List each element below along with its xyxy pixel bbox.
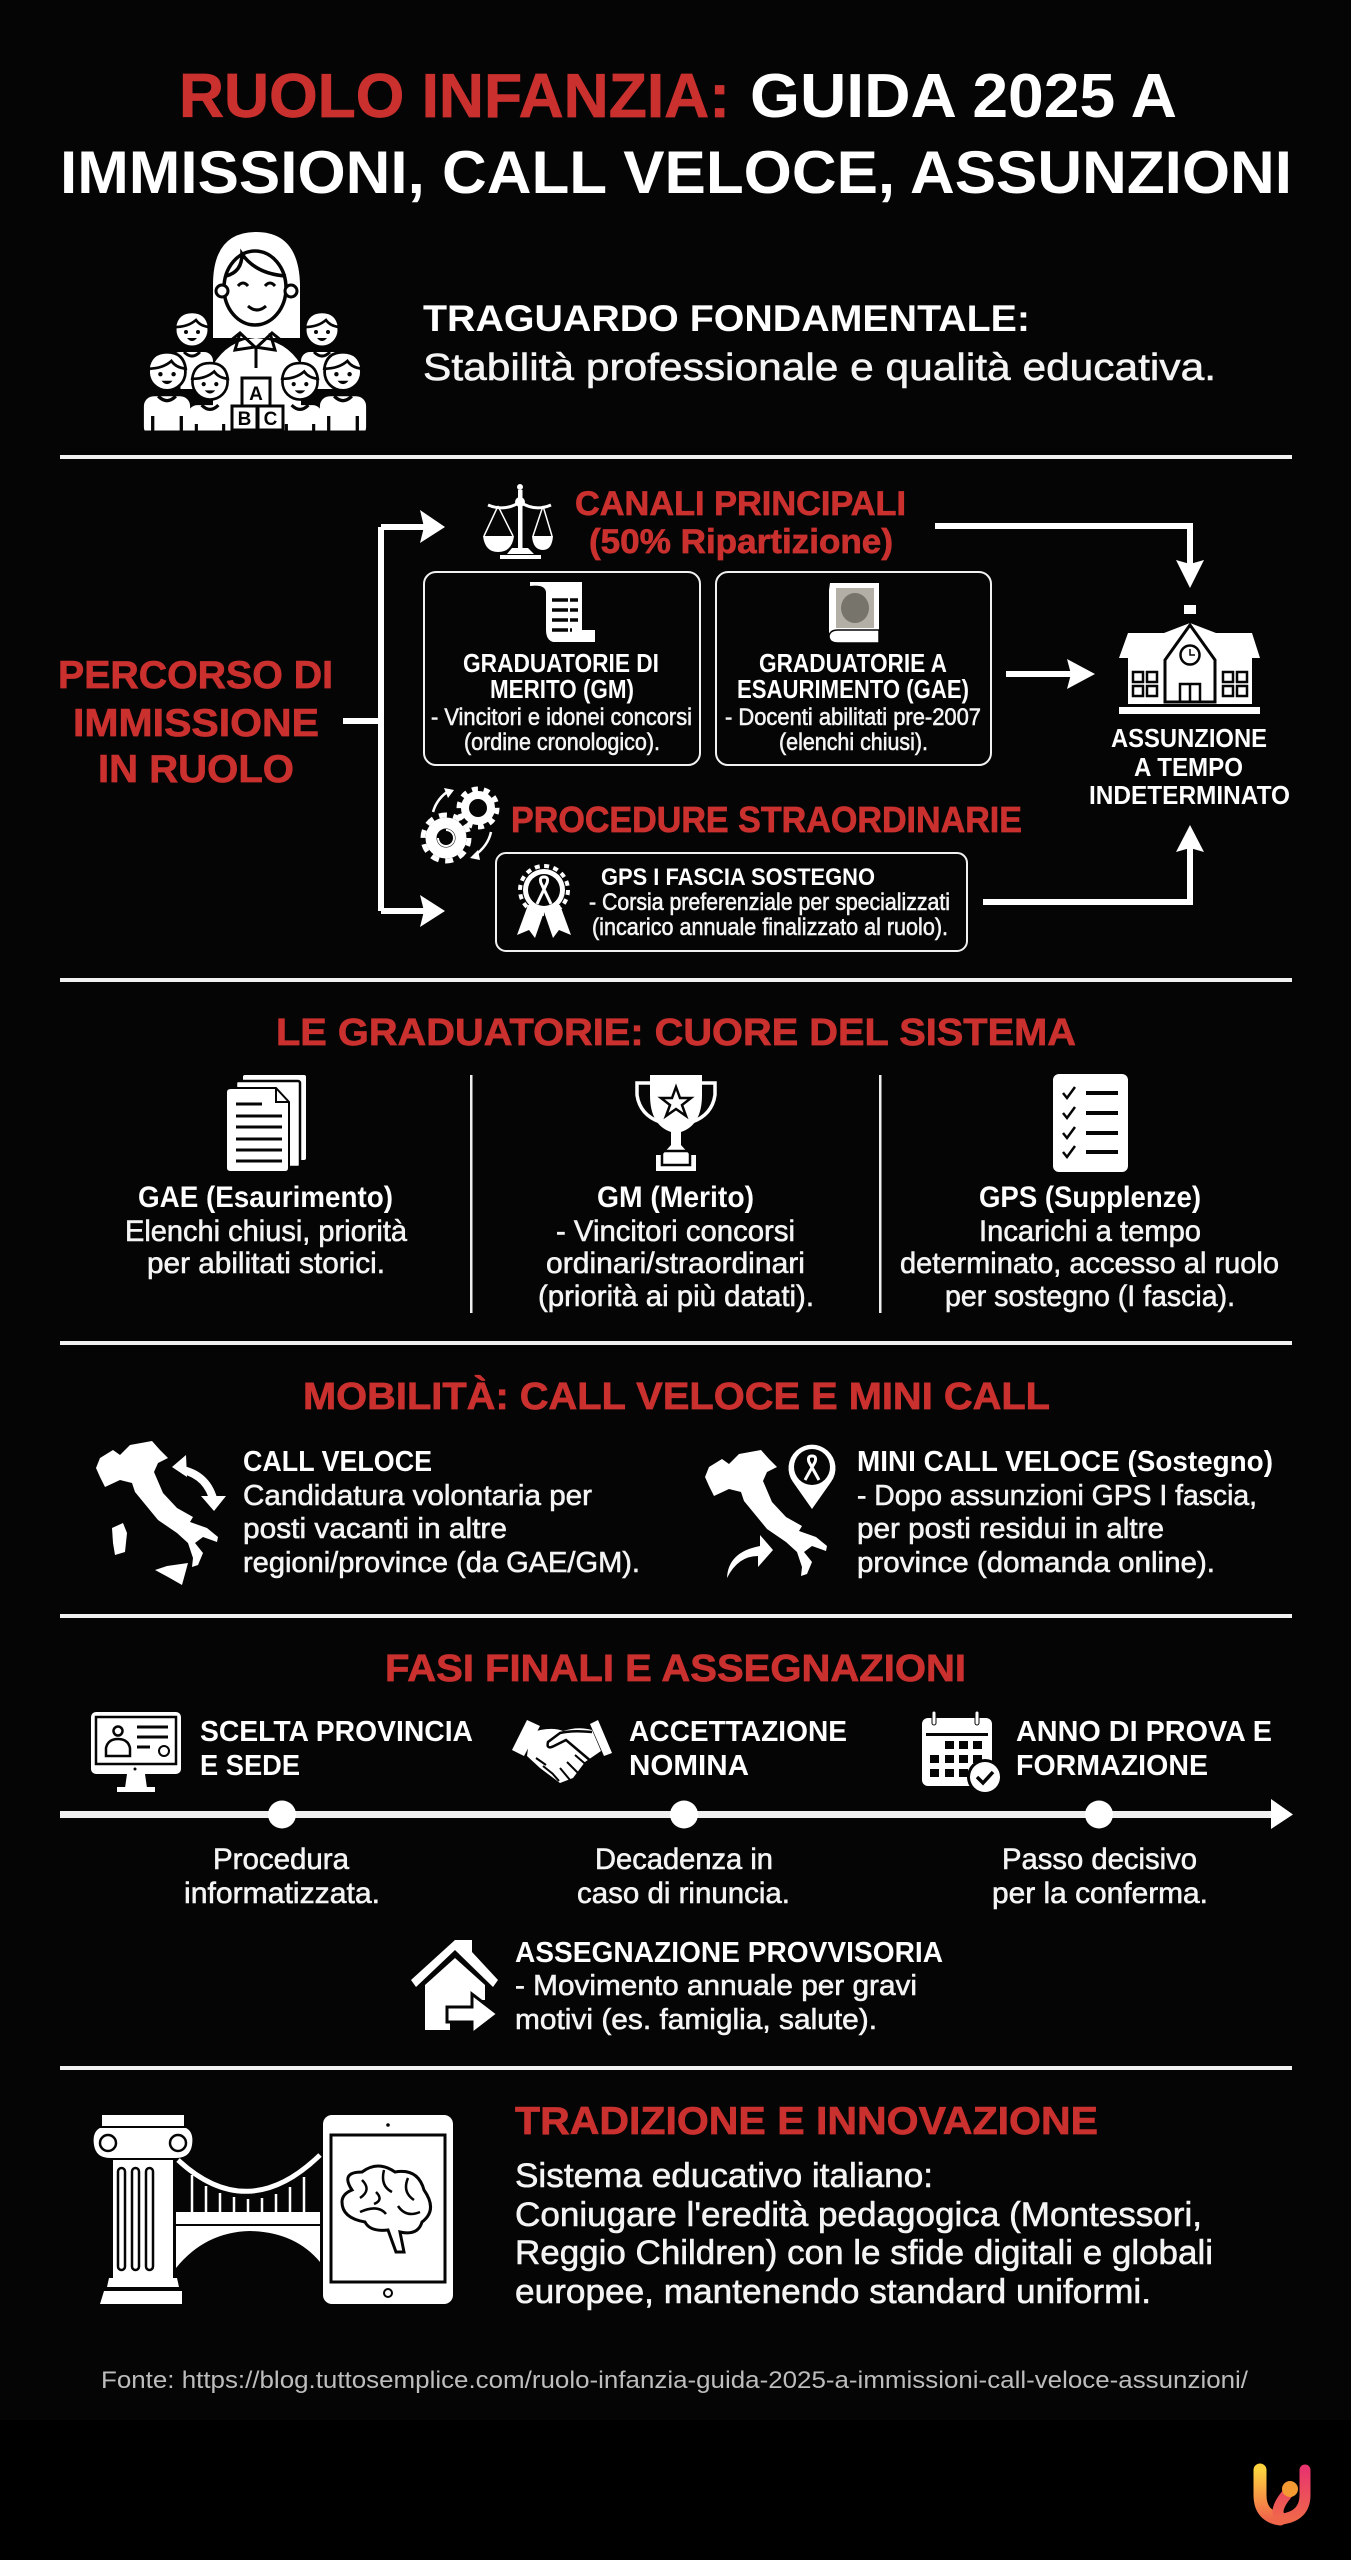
icon: scales — [483, 484, 553, 559]
label: assunzione a tempo indeterminato: INDETERMINATO — [1089, 780, 1290, 810]
card: graduatorie a esaurimento: ESAURIMENTO (GAE) — [737, 674, 969, 704]
text: decadenza: Decadenza in — [595, 1843, 773, 1876]
timeline arrow with milestones — [60, 1799, 1293, 1829]
icon: teacher with children and ABC blocks: C — [264, 409, 278, 430]
card: gps i fascia sostegno: - Corsia preferenziale per specializzati — [589, 889, 950, 916]
text: decadenza: caso di rinuncia. — [577, 1877, 790, 1910]
panel: percorso di immissione in ruolo — [58, 484, 1290, 951]
panel: le graduatorie — [125, 1012, 1279, 1313]
column: GPS — [900, 1074, 1279, 1313]
heading: percorso: IMMISSIONE — [73, 702, 319, 745]
heading: tradizione e innovazione: TRADIZIONE E INNOVAZIONE — [515, 2100, 1098, 2143]
text: scelta provincia: E SEDE — [200, 1750, 300, 1782]
title: GUIDA 2025 A — [750, 62, 1177, 131]
key goal text: Stabilità professionale e qualità educativa. — [423, 347, 1216, 389]
column: GPS: determinato, accesso al ruolo — [900, 1247, 1279, 1280]
icon: handshake — [512, 1720, 612, 1783]
text: scelta provincia: SCELTA PROVINCIA — [200, 1716, 473, 1748]
icon: documents — [226, 1075, 306, 1172]
icon: italy with location pin and arrow — [705, 1445, 836, 1578]
heading: canali principali: (50% Ripartizione) — [589, 523, 893, 561]
icon: monitor with profile — [91, 1712, 181, 1792]
title: RUOLO INFANZIA: — [179, 62, 730, 131]
icon: book — [829, 583, 879, 643]
heading: canali principali — [575, 485, 906, 561]
column: GM: ordinari/straordinari — [546, 1247, 805, 1280]
text: assegnazione provvisoria: ASSEGNAZIONE PROVVISORIA — [515, 1937, 943, 1969]
icon: medal with ribbon — [517, 866, 571, 938]
text: mini call veloce: per posti residui in altre — [857, 1513, 1164, 1545]
heading: procedure straordinarie: PROCEDURE STRAORDINARIE — [511, 799, 1022, 840]
arrow: cards to assunzione — [1006, 659, 1095, 689]
icon: trophy — [637, 1075, 715, 1171]
title: IMMISSIONI, CALL VELOCE, ASSUNZIONI — [60, 139, 1292, 206]
text: call veloce: CALL VELOCE — [243, 1446, 432, 1478]
icon: gears — [423, 788, 497, 861]
icon: italy with arrows — [96, 1441, 226, 1585]
card: graduatorie a esaurimento: - Docenti abilitati pre-2007 — [725, 704, 981, 731]
text: procedura informatizzata — [184, 1843, 380, 1910]
card: graduatorie di merito: - Vincitori e idonei concorsi — [431, 704, 692, 731]
text: call veloce: posti vacanti in altre — [243, 1513, 507, 1545]
text: call veloce — [243, 1446, 640, 1579]
column: GM: - Vincitori concorsi — [556, 1215, 795, 1248]
text: decadenza — [577, 1843, 790, 1910]
icon: scroll — [530, 582, 595, 642]
icon: teacher with children and ABC blocks — [140, 232, 375, 444]
label: assunzione a tempo indeterminato: ASSUNZIONE — [1111, 723, 1267, 753]
text: passo decisivo: per la conferma. — [992, 1877, 1208, 1910]
text: sistema educativo: europee, mantenendo standard uniformi. — [515, 2273, 1151, 2311]
heading: canali principali: CANALI PRINCIPALI — [575, 485, 906, 523]
card: graduatorie di merito: GRADUATORIE DI — [463, 648, 659, 678]
text: sistema educativo: Coniugare l'eredità pedagogica (Montessori, — [515, 2196, 1202, 2234]
text: passo decisivo: Passo decisivo — [1002, 1843, 1197, 1876]
text: scelta provincia — [200, 1716, 473, 1782]
card: graduatorie a esaurimento: (elenchi chiusi). — [779, 729, 928, 756]
icon: checklist — [1053, 1074, 1128, 1172]
card: graduatorie di merito — [424, 572, 700, 765]
column: GAE: Elenchi chiusi, priorità — [125, 1215, 407, 1248]
panel: mobilita — [96, 1374, 1273, 1585]
heading: percorso — [58, 654, 333, 791]
column: GM — [538, 1075, 814, 1313]
icon: school building — [1119, 605, 1260, 714]
icon: calendar with check — [922, 1711, 1003, 1795]
text: call veloce: Candidatura volontaria per — [243, 1480, 592, 1512]
panel: tradizione e innovazione — [94, 2100, 1213, 2311]
text: accettazione nomina: NOMINA — [629, 1750, 749, 1782]
text: accettazione nomina — [629, 1716, 847, 1782]
text: sistema educativo: Sistema educativo italiano: — [515, 2157, 933, 2195]
text: assegnazione provvisoria: - Movimento annuale per gravi — [515, 1970, 917, 2002]
text: sistema educativo — [515, 2157, 1213, 2311]
icon: house with arrow — [411, 1940, 498, 2034]
text: call veloce: regioni/province (da GAE/GM). — [243, 1547, 640, 1579]
column: GPS: GPS (Supplenze) — [979, 1181, 1201, 1214]
card: gps i fascia sostegno — [496, 853, 967, 951]
heading: percorso: PERCORSO DI — [58, 654, 333, 697]
card: graduatorie di merito: MERITO (GM) — [490, 674, 634, 704]
heading: percorso: IN RUOLO — [98, 748, 294, 791]
icon: column, bridge and tablet with brain — [94, 2115, 453, 2304]
heading: le graduatorie: LE GRADUATORIE: CUORE DEL SISTEMA — [276, 1012, 1076, 1054]
card: gps i fascia sostegno: (incarico annuale finalizzato al ruolo). — [592, 914, 948, 941]
text: mini call veloce: MINI CALL VELOCE (Sostegno) — [857, 1446, 1273, 1478]
card: graduatorie a esaurimento — [716, 572, 991, 765]
column: GM: GM (Merito) — [597, 1181, 754, 1214]
text: procedura informatizzata: Procedura — [213, 1843, 349, 1876]
arrow: procedure to assunzione — [983, 825, 1204, 902]
text: anno di prova: FORMAZIONE — [1016, 1750, 1208, 1782]
card: gps i fascia sostegno: GPS I FASCIA SOSTEGNO — [601, 864, 875, 891]
icon: teacher with children and ABC blocks: B — [238, 409, 251, 430]
text: sistema educativo: Reggio Children) con le sfide digitali e globali — [515, 2234, 1213, 2272]
column: GAE: per abilitati storici. — [147, 1247, 385, 1280]
panel: fasi finali — [60, 1648, 1293, 2036]
column: GPS: Incarichi a tempo — [979, 1215, 1201, 1248]
column: GPS: per sostegno (I fascia). — [945, 1280, 1235, 1313]
card: graduatorie di merito: (ordine cronologico). — [464, 729, 660, 756]
icon: brand logo — [1260, 2470, 1305, 2519]
text: accettazione nomina: ACCETTAZIONE — [629, 1716, 847, 1748]
text: mini call veloce — [857, 1446, 1273, 1579]
card: graduatorie a esaurimento: GRADUATORIE A — [759, 648, 947, 678]
label: assunzione a tempo indeterminato: A TEMPO — [1134, 752, 1243, 782]
column: GAE: GAE (Esaurimento) — [138, 1181, 393, 1214]
arrow: canali to assunzione — [935, 526, 1204, 588]
label: assunzione a tempo indeterminato — [1089, 723, 1290, 810]
text: anno di prova — [1016, 1716, 1272, 1782]
source line: Fonte: https://blog.tuttosemplice.com/ruolo-infanzia-guida-2025-a-immissioni-call-veloce-assunzioni/ — [101, 2367, 1248, 2394]
icon: teacher with children and ABC blocks: A — [249, 384, 263, 405]
column: GM: (priorità ai più datati). — [538, 1280, 814, 1313]
arrow: branching connector — [343, 510, 445, 927]
text: passo decisivo — [992, 1843, 1208, 1910]
key goal text — [423, 298, 1216, 389]
title — [60, 62, 1292, 206]
text: assegnazione provvisoria — [515, 1937, 943, 2036]
column: GAE — [125, 1075, 407, 1280]
text: anno di prova: ANNO DI PROVA E — [1016, 1716, 1272, 1748]
text: procedura informatizzata: informatizzata. — [184, 1877, 380, 1910]
text: mini call veloce: - Dopo assunzioni GPS I fascia, — [857, 1480, 1257, 1512]
text: mini call veloce: province (domanda online). — [857, 1547, 1215, 1579]
text: assegnazione provvisoria: motivi (es. famiglia, salute). — [515, 2004, 877, 2036]
heading: mobilita: MOBILITÀ: CALL VELOCE E MINI CALL — [303, 1374, 1050, 1418]
heading: fasi finali: FASI FINALI E ASSEGNAZIONI — [385, 1648, 966, 1690]
key goal text: TRAGUARDO FONDAMENTALE: — [423, 298, 1030, 339]
